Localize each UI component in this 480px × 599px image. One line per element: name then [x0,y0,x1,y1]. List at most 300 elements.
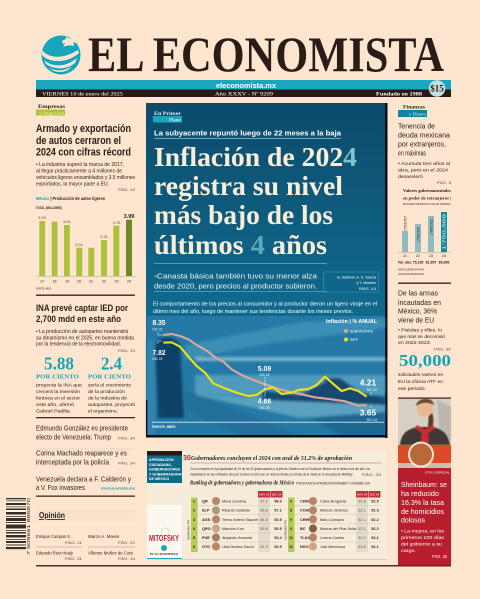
summary: PÁG. 19 [118,348,136,353]
row: 3 AGS: 54.8 [260,518,268,522]
summary [398,161,451,185]
byline box: PÁGS. 4-5 [359,287,376,291]
label 3.65 [360,408,377,422]
row: 6 CDMX: 52.5 [371,500,379,504]
bar chart: producción de autos: 3.78 [113,220,121,225]
headline: de autos cerraron el [36,135,121,147]
price badge [429,80,445,97]
stat 5.88 por ciento: foránea en el sector [36,396,80,402]
table headers: DIC 24 [370,492,379,496]
side tag: DE MÉXICO [149,476,169,481]
brief: Corina Machado [36,448,136,466]
right column: armas story [398,288,452,392]
seal [408,442,434,468]
headline: 16.3% la tasa [401,498,445,507]
main headline: más bajo de los [154,199,333,230]
row: 6 CDMX: 6 [290,500,292,504]
row: 1 QR [193,497,282,505]
row: 6 CDMX: 52.8 [358,500,366,504]
founded: Fundado en 1988 [376,92,423,98]
section tag: Finanzas [403,106,425,110]
bar chart: producción de autos: 19 [65,280,69,284]
summary: • Acumula tres años al [398,161,450,167]
bar chart: producción de autos: 20 [77,280,81,284]
summary [398,328,452,352]
intro paragraph [153,302,377,315]
brief: Corina Machado: Corina Machado reaparece y es [36,448,127,458]
label 4.21 [360,378,377,392]
story text: PÁG. 33 [362,472,382,477]
stat 2.4 por ciento: sería el crecimiento [88,382,131,388]
label 4.66: 4.66 [258,398,271,406]
brief: Edmundo González: electo de Venezuela: Trump [36,432,111,442]
brief: Edmundo González [36,424,136,442]
row: 6 GTO: Libia Dennise García [222,545,255,549]
chart source: FUENTE: INEGI [36,286,51,290]
row: 9 CHIH: 9 [290,518,292,522]
brief: Corina Machado: PÁG. 34 [118,460,136,466]
legend: INPP [350,338,359,342]
row: 3 AGS: 3 [193,518,195,522]
section tag: y Negocios [39,110,64,116]
section tag [398,106,427,117]
gray value columns [258,498,270,552]
chart title: Inflación | % ANUAL [326,319,377,325]
barcode: 7 509661 885870 [26,497,31,555]
stat 2.4 por ciento: el organismo. [88,408,118,414]
price badge: $15 [430,84,444,94]
left ranking table [191,497,283,552]
story title: Gobernadores concluyen el 2024 con aval de 51.2% de aprobación [191,455,352,462]
bar chart: valores gubernamentales: 1'669,922 [430,219,434,235]
stat 5.88 por ciento [36,354,82,414]
chart title: México | Producción de autos ligeros [36,196,105,201]
stat text: solicitudes rastreó en [398,372,443,378]
row: 4 QRO: QRO [202,527,211,531]
bottom rule [36,565,451,566]
vertical table labels [186,520,288,540]
bar chart: valores gubernamentales: Var. abs. [398,260,412,264]
story text: Con un reporte en la popularidad de 10 de los 31 gobernadores y la jefa de Gobierno de la Ciudad de México en el último mes del año, los [190,467,370,471]
story title: 30 [183,455,191,462]
row: 1 QR: QR [202,500,208,504]
label 8.35: 8.35 [152,320,166,327]
row: 9 BC: BC [300,527,306,531]
row: 1 QR: 58.0 [274,500,282,504]
row: 4 QRO: 4 [193,527,196,531]
headline: ha reducido [401,489,439,498]
dark date bar [36,90,451,97]
left column: briefs [36,424,136,492]
stat 5.88 por ciento: 5.88 [44,354,74,374]
headline: deuda mexicana [398,130,451,140]
row: 11 TLAX: 52.2 [358,536,366,540]
headline: en máximas [398,148,426,158]
bar chart: producción de autos: 3.04 [75,242,84,247]
row: 9 BC: Marina del Pilar Ávila [320,527,357,531]
section tag: En Primer [154,111,182,117]
summary: • La industria superó la marca de 2017, [36,162,124,168]
bar chart: valores gubernamentales: 1'750,569 [442,213,446,250]
table headers: DIC 24 [272,492,281,496]
summary: PÁG. 25 [432,554,448,559]
bar chart: valores gubernamentales: 1'503,667 [404,216,408,231]
headline: incautadas en [398,298,441,307]
label 8.35 [152,320,166,332]
section tag: Empresas [38,105,65,110]
intro paragraph: El comportamiento de los precios al consumidor y al productor dieron un ligero viraje en el [153,302,377,308]
ranking heading: Ranking de gobernadores y gobernadoras de México [189,480,294,486]
summary: PÁG. 19 [118,187,136,192]
row: 8 COAH: Manolo Jiménez [320,509,348,513]
summary: • La mejora, en los [401,528,445,534]
chart source: FUENTE: INEGI [152,425,175,429]
summary: desaceleró. [398,174,424,180]
line: INPP [163,342,367,397]
bar chart: producción de autos: 21 [89,280,93,284]
row: 3 AGS: 53.9 [274,518,282,522]
row: 6 CDMX: Clara Brugada [320,500,347,504]
bar chart: producción de autos [36,196,135,290]
stat 2.4 por ciento: 2.4 [101,354,122,374]
bar chart: valores gubernamentales: 81,957 [426,260,436,264]
brief: Corina Machado: interceptada por la policía [36,458,110,466]
row: 6 CDMX: CDMX [300,500,312,504]
right column: deuda story [398,106,451,276]
row: 11 TLAX: TLAX [300,536,310,540]
row: 2 SLP: 56.6 [260,509,268,513]
summary: • Pistolas y rifles, lo [398,328,442,334]
byline box: y Y. Morales [357,281,376,285]
brief: Venezuela: eleconomista.mx [101,486,136,490]
summary [36,162,136,192]
summary: por la tendencia de la electromovilidad. [36,342,121,348]
table headers: NOV 24 [357,492,368,496]
label 4.21: DIC 24 [367,388,377,392]
chart source: CON CIFRAS DE BANXICO [398,272,425,276]
row: 1 QR: 1 [193,500,195,504]
columnists: PÁG. 31 [65,556,83,561]
row: 8 COAH: 8 [290,509,292,513]
row: 11 HGO: Julio Menchaca [320,545,346,549]
stat 5.88 por ciento: crecerá la inversión [36,389,80,395]
panel: Opinión [36,509,136,561]
stat 2.4 por ciento: de la industria de [88,396,127,402]
row: 8 COAH [290,506,379,514]
row: 4 QRO: Mauricio Kuri [222,527,244,531]
summary: su dinamismo en el 2025, en buena medida [36,336,134,342]
headline: Tenencia de [398,122,435,130]
bar chart: valores gubernamentales: 1'590,932 [416,227,420,242]
headline [36,303,128,324]
headline: México, 36% [398,306,437,316]
stat 5.88 por ciento: este año, afirmó [36,402,74,408]
chart unit: MILLONES DE PESOS A VALOR NOMINAL [403,202,451,206]
icon: El Economista globe logo [42,36,80,74]
summary: exportados, la mayor parte a EU. [36,182,109,188]
Mitofsky logo box: EL ECONOMISTA [150,552,179,556]
story text: mandatarios en las entidades del país cerraron el año con un nivel promedio por arriba de la mitad en la encuesta de Mitofsky. [190,472,353,476]
stat 2.4 por ciento: de la producción [88,389,125,395]
bar chart: producción de autos: 3.31 [100,234,109,239]
stat 50,000: 50,000 [399,351,451,370]
subheading: La subyacente repuntó luego de 22 meses a la baja [154,128,342,138]
columnists: Eduardo Ruiz-Healy [36,550,74,556]
row: 9 BC [290,524,379,532]
row: 9 CHIH: 52.2 [371,518,379,522]
row: 6 GTO: 52.5 [274,545,282,549]
summary: cargo. [401,548,416,554]
section tag [36,105,65,116]
side tag: CIUDADANA, [149,463,172,467]
summary [36,329,136,353]
summary: • La producción de autopartes mantendrá [36,329,128,335]
summary: PÁG. 30 [434,346,452,352]
summary: alza, pero en el 2024 [398,168,448,174]
row: 5 PUE: Alejandro Armenta [222,536,253,540]
legend: SUBYACENTE [350,330,374,334]
row: 9 CHIH [290,515,379,523]
table headers [258,491,380,498]
brief: Edmundo González: Edmundo González es presidente [36,424,128,432]
bar chart: valores gubernamentales: 21 [403,254,407,258]
brief: Edmundo González: PÁG. 34 [118,436,136,440]
label 7.82: 7.82 [152,350,166,357]
side tag [147,451,185,483]
headline: Armado y exportación [36,123,131,135]
headline: De las armas [398,288,438,298]
main headline: Inflación de 2024 [154,141,357,172]
bar chart: valores gubernamentales: 23 [429,254,433,258]
row: 9 BC: 9 [290,527,292,531]
label 4.66 [258,398,271,410]
chart source [398,266,425,276]
row: 8 COAH: COAH [300,509,311,513]
bar chart: valores gubernamentales: 22 [416,254,420,258]
row: 8 COAH: 52.3 [371,509,379,513]
row: 6 GTO: GTO [202,545,210,549]
secondary deck: ▪Canasta básica también tuvo su menor alza [154,272,317,280]
label 5.09 [258,366,271,377]
headline: dolosos [401,516,425,524]
summary: del gobierno a su [401,542,442,548]
row: 3 AGS: AGS [202,518,211,522]
barcode [5,497,31,555]
row: 2 SLP: SLP [202,509,210,513]
row: 11 HGO: 11 [289,545,293,549]
row: 9 BC: 52.2 [371,527,379,531]
bar chart: valores gubernamentales: 75,135 [413,260,423,264]
headline [36,123,131,158]
row: 3 AGS: Teresa Jiménez Esquivel [222,518,258,522]
columnists: Enrique Campos S. [36,534,71,539]
legend [344,329,374,342]
bar chart: producción de autos: 3.99 [124,214,134,220]
summary: en 2022-2023. [398,340,431,346]
issue number: Año XXXV - Nº 9209 [215,92,274,98]
headline: 2024 con cifras récord [36,146,131,158]
byline box [323,272,378,292]
main headline [154,141,357,260]
side tag: Y GOBERNADORAS, [149,472,185,476]
label 3.65: 3.65 [360,408,377,418]
right ranking table [288,497,379,552]
section tag [153,111,182,124]
row: 11 TLAX: Lorena Cuéllar [320,536,345,540]
summary: que más se decomisó [398,334,445,340]
headline [398,122,451,158]
row: 11 HGO: 53.5 [358,545,366,549]
connector lines [158,332,371,408]
row: 11 TLAX: 11 [289,536,293,540]
headline: de homicidios [401,507,444,516]
secondary deck [154,272,317,290]
row: 4 QRO: 53.5 [274,527,282,531]
ranking heading: PORCENTAJE DE APROBACIÓN NOVIEMBRE Y DICIEMBRE 2024 [296,480,370,486]
stat 2.4 por ciento [88,354,135,414]
headline: por extranjeros, [398,140,446,148]
summary: vehículos ligeros ensamblados y 3.5 millones [36,175,135,181]
label 7.82: DIC 22 [152,357,163,361]
photo: Sheinbaum at lectern [398,399,451,445]
stat text: EU la oficina ATF en [398,379,443,385]
row: 2 SLP: 2 [193,509,195,513]
bar chart: producción de autos: 22 [102,280,106,284]
columnists [36,534,136,561]
intro paragraph: último mes del año, luego de mantener sus tendencias durante los meses previos. [153,309,353,315]
brief: Venezuela: Venezuela declara a F. Calderón y [36,474,131,484]
stat 5.88 por ciento: Gabriel Padilla. [36,408,71,414]
columnists: Marco A. Mares [88,534,119,539]
masthead [36,26,451,98]
stat 2.4 por ciento: POR CIENTO [88,374,131,380]
section tag: Plano [169,118,182,124]
label 3.65: DIC 24 [367,418,377,422]
line: subyacente [163,334,367,406]
row: 9 BC: 52.1 [358,527,366,531]
brief: Venezuela: a V. Fox invasores [36,483,85,492]
columnists: PÁG. 11 [65,540,83,545]
website: eleconomista.mx [216,83,276,90]
bar chart: producción de autos: 17 [40,280,44,284]
row: 5 PUE: 5 [193,536,195,540]
headline: viene de EU [398,316,434,324]
columnists: Alfonso Muñoz de Cote [88,550,134,556]
row: 6 GTO [193,542,282,550]
row: 11 TLAX: 52.1 [371,536,379,540]
table headers: NOV 24 [259,492,270,496]
bar chart: valores gubernamentales: en poder de extranjeros | [403,196,451,200]
headline: Sheinbaum: se [401,480,447,489]
summary: primeros 100 días [401,535,445,541]
bar chart: producción de autos: 24 [127,280,131,284]
panel: governors ranking [147,451,386,561]
bar chart: valores gubernamentales: 24 [442,254,446,258]
stat 5.88 por ciento: POR CIENTO [36,374,79,380]
byline box: B. Saldívar, A. K. García [337,276,376,280]
row: 11 TLAX [289,534,379,542]
main headline: últimos 4 años [154,229,327,260]
chart unit: TOTAL (MILLONES) [36,206,62,210]
side tag: APROBACIÓN [149,457,174,462]
row: 11 HGO [289,542,379,550]
row: 4 QRO [193,524,282,532]
chart title: Valores gubernamentales [403,188,451,193]
stat text [398,372,443,392]
row: 6 CDMX [290,497,379,505]
stat 5.88 por ciento: proyecta la INA que [36,382,82,388]
red story box [398,468,451,565]
red lectern band [398,445,451,467]
row guides [191,506,381,542]
summary: al llegar prácticamente a 4 millones de [36,168,122,174]
summary: PÁG. 5 [437,181,451,185]
row: 11 HGO: HGO [300,545,309,549]
chart photo background [147,316,385,435]
row: 6 GTO: 51.9 [260,545,268,549]
brief: Venezuela [36,474,136,492]
left column: INA story [36,303,136,414]
row: 2 SLP: Ricardo Gallardo [222,509,250,513]
label 7.82 [152,350,166,361]
row: 6 GTO: 6 [193,545,195,549]
right column: Sheinbaum story [398,399,451,565]
bar chart: valores gubernamentales [398,188,451,276]
teal bar [36,80,451,90]
bar chart: valores gubernamentales: 80,969 [439,260,449,264]
headline [398,288,441,324]
row: 2 SLP: 57.1 [274,509,282,513]
label 5.09: 5.09 [258,366,271,373]
Mitofsky logo box [147,505,182,559]
row: 8 COAH: 52.1 [358,509,366,513]
row: 9 CHIH: CHIH [300,518,310,522]
chart source: FUENTE: ELABORACIÓN PROPIA [398,266,424,272]
summary [401,528,448,559]
row: 9 CHIH: Maru Campos [320,518,344,522]
row: 1 QR: 57.2 [260,500,268,504]
side tag: GOBERNADORES [149,468,181,472]
row: 5 PUE [193,534,283,542]
row: 2 SLP [193,506,282,514]
row: 11 HGO: 52.1 [371,545,379,549]
row: 1 QR: Mara Lezama [222,500,247,504]
bar chart: producción de autos: 18 [52,280,56,284]
row: 4 QRO: 53.8 [260,527,268,531]
label 4.66: DIC 23 [260,406,270,410]
stat 2.4 por ciento: autopartes, proyectó [88,402,135,408]
row: 9 CHIH: 52.1 [358,518,366,522]
section tag: y Dinero [409,112,427,116]
label 8.35: DIC 22 [152,328,163,332]
label 5.09: DIC 23 [260,373,270,377]
row: 5 PUE: 53.4 [274,536,283,540]
row: 5 PUE: PUE [202,536,210,540]
left column: autos story [36,105,136,290]
stat text: ese periodo. [398,386,426,392]
vertical table labels: Aprobados 4% [186,520,190,540]
label 4.21: 4.21 [360,378,377,388]
opinion heading: Opinión [39,511,65,520]
columnists: PÁG. 20 [118,540,136,545]
bar chart: producción de autos: 3.93 [38,215,47,220]
secondary deck: desde 2020, pero precios al productor subieron. [154,282,317,290]
Mitofsky logo box: MITOFSKY [149,534,179,543]
headline [401,480,447,524]
row: 3 AGS [193,515,282,523]
panel: En Primer Plano lead story [146,103,388,438]
main headline: registra su nivel [154,170,343,201]
